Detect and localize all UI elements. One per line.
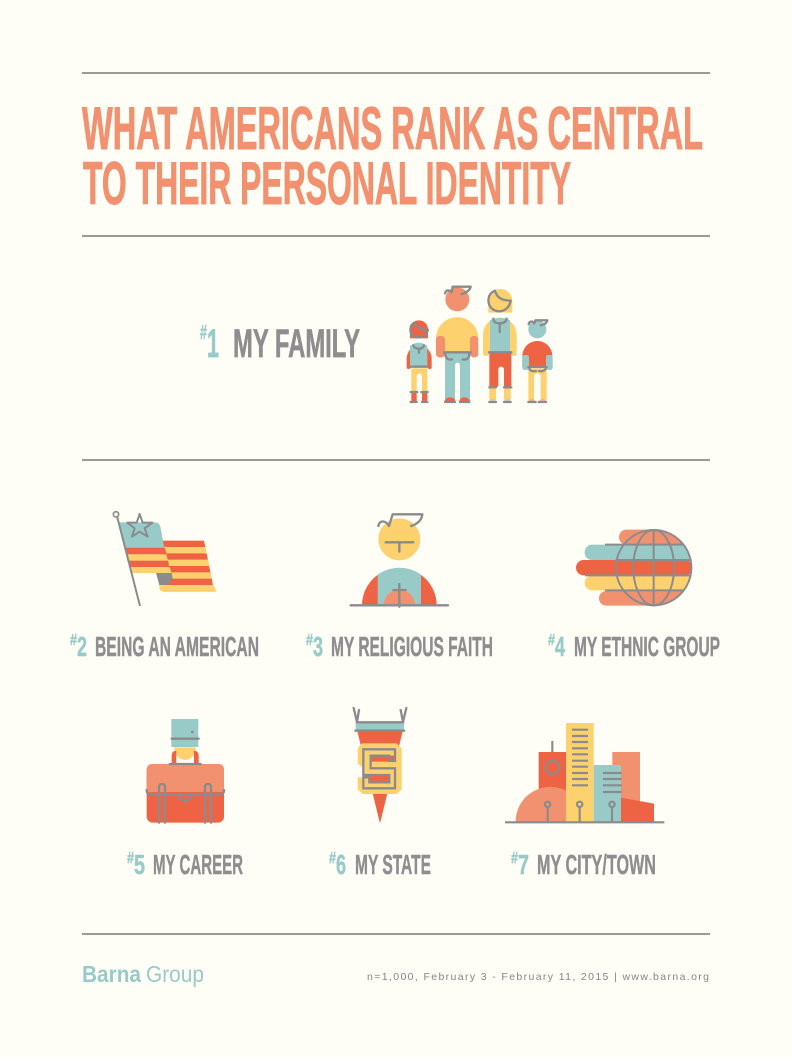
rank 6 label: #	[329, 850, 336, 867]
icon: religious faith	[351, 514, 448, 607]
rank 5 label: 5	[134, 849, 145, 880]
rank 3 label: MY RELIGIOUS FAITH	[331, 631, 493, 662]
rank 1 label: my family: 1	[207, 322, 219, 366]
rank 6 label	[329, 849, 431, 880]
rank 2 label: #	[70, 632, 77, 649]
figure: daughter	[407, 320, 432, 402]
rank 7 label: 7	[518, 849, 529, 880]
figure: son	[522, 320, 553, 402]
rank 3 label	[306, 631, 493, 662]
icon: career briefcase	[147, 719, 224, 823]
footer logo: Barna Group: Barna	[82, 961, 141, 987]
rank 4 label: #	[548, 632, 555, 649]
rank 7 label: #	[511, 850, 518, 867]
rank 4 label	[548, 631, 720, 662]
rank 7 label	[511, 849, 656, 880]
rank 3 label: 3	[313, 631, 323, 662]
footer logo: Barna Group	[82, 961, 204, 987]
footer logo: Barna Group: Group	[146, 961, 204, 987]
rank 2 label: 2	[77, 631, 87, 662]
figure: father	[436, 287, 478, 402]
rank 6 label: MY STATE	[355, 849, 431, 880]
rank 7 label: MY CITY/TOWN	[537, 849, 656, 880]
rank 2 label	[70, 631, 259, 662]
rank 4 label: 4	[555, 631, 565, 662]
rank 3 label: #	[306, 632, 313, 649]
rank 1 label: my family	[200, 322, 360, 366]
icon: american flag	[113, 512, 217, 606]
icon: globe	[576, 530, 695, 606]
rank 6 label: 6	[336, 849, 346, 880]
rank 5 label	[127, 849, 243, 880]
rank 5 label: #	[127, 850, 134, 867]
icon: state pennant	[354, 708, 406, 823]
icon: family	[407, 287, 553, 402]
title	[82, 95, 703, 217]
icon: city skyline	[505, 723, 664, 823]
rank 2 label: BEING AN AMERICAN	[95, 631, 259, 662]
rank 1 label: my family: MY FAMILY	[233, 322, 360, 366]
rank 5 label: MY CAREER	[153, 849, 243, 880]
infographic page	[70, 72, 720, 987]
footer source note: n=1,000, February 3 - February 11, 2015 | www.barna.org	[367, 971, 709, 983]
rank 1 label: my family: #	[200, 322, 207, 344]
figure: mother	[483, 289, 517, 402]
